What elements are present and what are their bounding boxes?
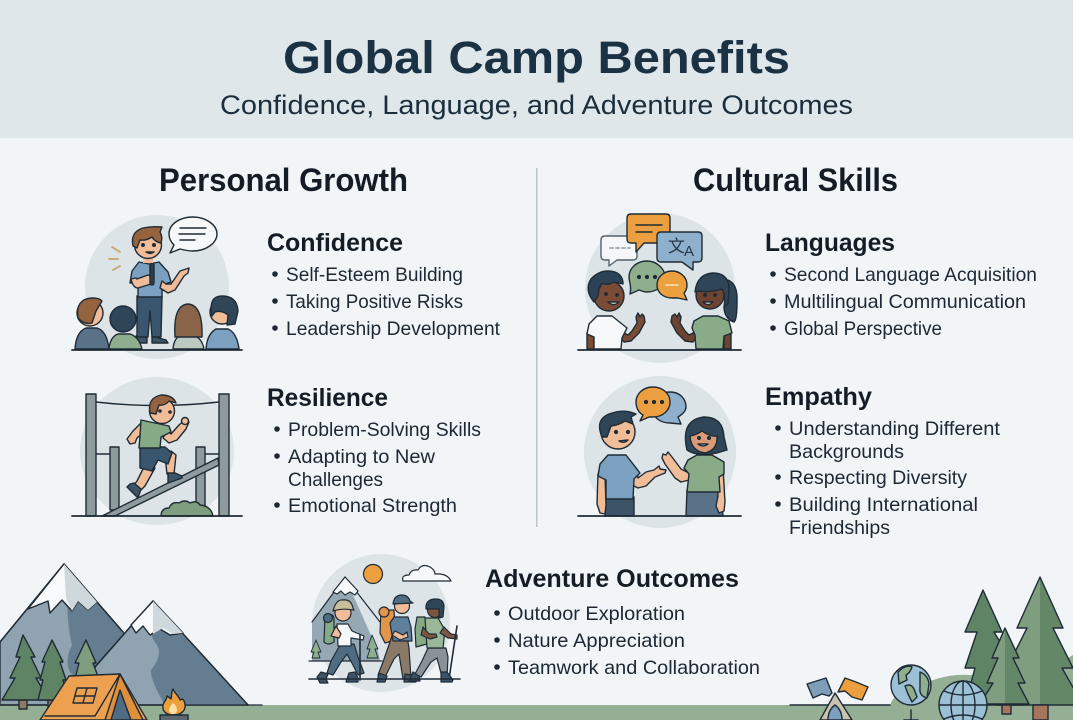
text block: empathy: Backgrounds xyxy=(789,441,904,463)
icon: boy on balance beam xyxy=(72,377,242,525)
text block: empathy: Understanding Different xyxy=(789,418,1001,440)
tent xyxy=(40,674,147,720)
tree: back xyxy=(965,590,1025,705)
text block: confidence: Taking Positive Risks xyxy=(286,291,463,313)
panel: personal growth xyxy=(72,162,501,525)
text block: resilience: Resilience xyxy=(267,384,388,412)
text block: languages: Global Perspective xyxy=(784,318,942,340)
icon: small globe xyxy=(891,665,931,720)
panel: cultural skills xyxy=(578,162,1037,539)
text block: empathy: Empathy xyxy=(765,383,872,411)
text block: resilience xyxy=(267,384,481,517)
text block: resilience: Emotional Strength xyxy=(288,495,457,517)
text block: adventure outcomes: Nature Appreciation xyxy=(508,630,685,652)
tree: tall xyxy=(997,577,1073,720)
icon: language exchange xyxy=(578,213,741,363)
text block: languages: Second Language Acquisition xyxy=(784,264,1037,286)
heading: personal growth: Personal Growth xyxy=(159,162,408,198)
ground and hill xyxy=(820,655,1073,720)
icon: hikers xyxy=(309,554,460,692)
header banner xyxy=(0,0,1073,138)
text block: confidence xyxy=(267,229,501,340)
ground strip xyxy=(0,705,890,720)
text block: confidence: Self-Esteem Building xyxy=(286,264,463,286)
mountain: rear xyxy=(90,601,248,705)
text block: resilience: Adapting to New xyxy=(288,446,436,468)
icon: language exchange: A xyxy=(684,243,694,260)
text block: empathy: Building International xyxy=(789,494,978,516)
icon: wire globe xyxy=(939,681,987,720)
scene: forest, globes and flags xyxy=(790,577,1073,720)
mountain: tall xyxy=(0,564,140,705)
text block: confidence: Leadership Development xyxy=(286,318,501,340)
icon: language exchange: 文 xyxy=(668,237,685,256)
text block: adventure outcomes: Adventure Outcomes xyxy=(485,565,739,593)
text block: adventure outcomes: Outdoor Exploration xyxy=(508,603,685,625)
text block: languages: Multilingual Communication xyxy=(784,291,1026,313)
scene: mountains and campsite xyxy=(0,564,890,720)
campfire xyxy=(160,675,188,720)
text block: confidence: Confidence xyxy=(267,229,403,257)
tree: small xyxy=(980,628,1029,714)
text block: languages: Languages xyxy=(765,229,895,257)
text block: adventure outcomes: Teamwork and Collaboration xyxy=(508,657,760,679)
text block: resilience: Problem-Solving Skills xyxy=(288,419,481,441)
icon: two friends talking xyxy=(578,376,741,528)
panel: adventure outcomes xyxy=(309,554,760,692)
text block: resilience: Challenges xyxy=(288,469,383,491)
flags xyxy=(807,678,868,720)
heading: cultural skills: Cultural Skills xyxy=(693,162,898,198)
text block: empathy xyxy=(765,383,1001,539)
text block: empathy: Respecting Diversity xyxy=(789,467,967,489)
text block: languages xyxy=(765,229,1037,340)
trees xyxy=(2,635,101,709)
subtitle: Confidence, Language, and Adventure Outcomes xyxy=(220,90,853,120)
icon: confident speaker xyxy=(72,215,242,359)
text block: empathy: Friendships xyxy=(789,517,890,539)
text block: adventure outcomes xyxy=(485,565,760,679)
title: Global Camp Benefits xyxy=(283,32,790,83)
